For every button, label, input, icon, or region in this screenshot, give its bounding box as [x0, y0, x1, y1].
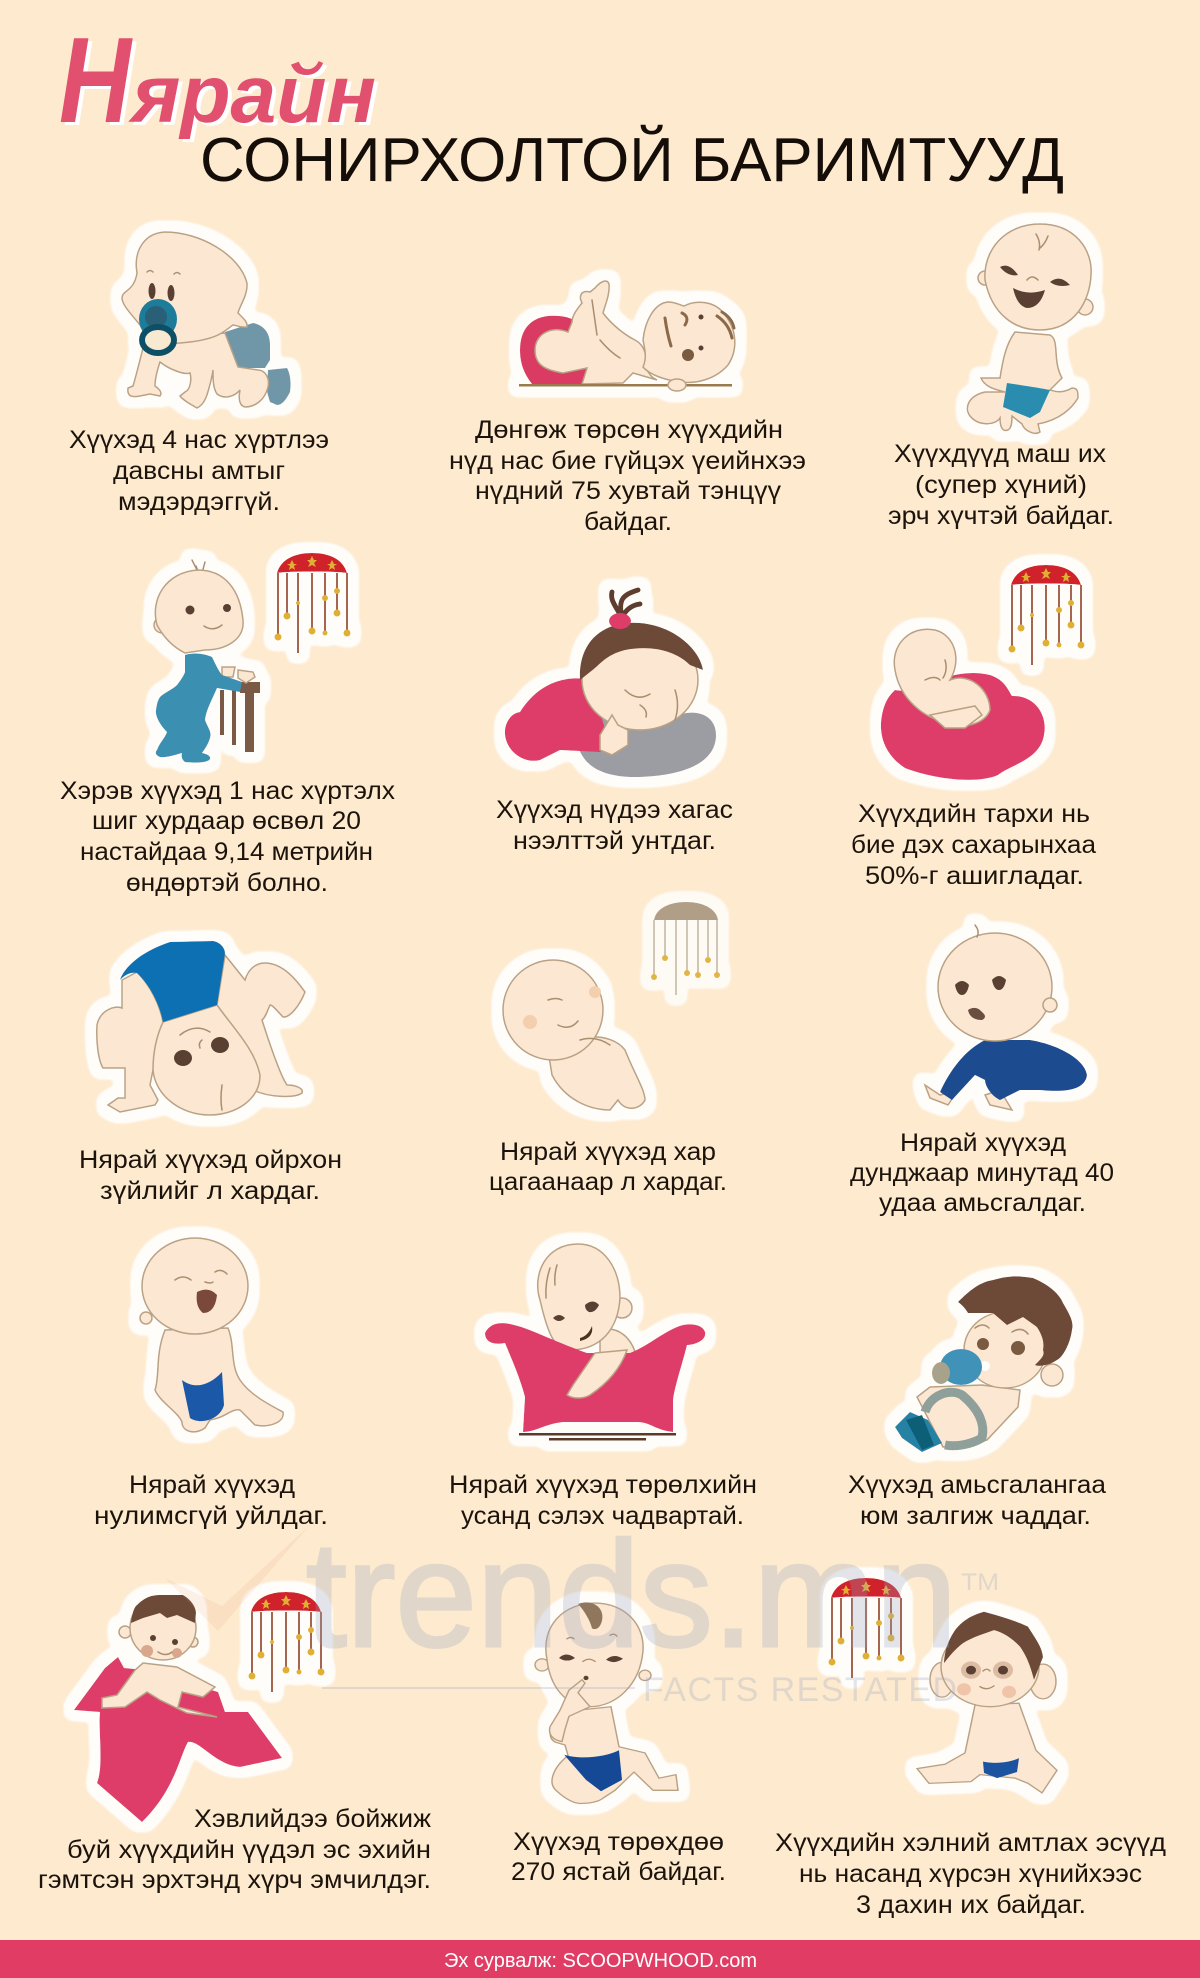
- illustration: red mobile: [1008, 565, 1084, 665]
- caption 8: [489, 1138, 727, 1196]
- caption 7: зүйлийг л хардаг.: [100, 1177, 320, 1205]
- illustration: baby with pacifier: [122, 232, 291, 408]
- caption 4: Хэрэв хүүхэд 1 нас хүртэлх: [60, 777, 396, 805]
- illustration: sleeping girl: [505, 590, 716, 777]
- illustration: baby in tub: [485, 1244, 705, 1440]
- caption 1: давсны амтыг: [113, 457, 285, 485]
- caption 2: [449, 416, 806, 536]
- caption 2: Дөнгөж төрсөн хүүхдийн: [475, 416, 783, 444]
- footer source text: Эх сурвалж: SCOOPWHOOD.com: [444, 1950, 757, 1972]
- caption 7: [79, 1146, 342, 1205]
- illustration: baby on cloud: [881, 629, 1045, 780]
- illustration: red mobile: [248, 1592, 324, 1692]
- caption 5: нээлттэй унтдаг.: [513, 827, 716, 855]
- caption 15: 3 дахин их байдаг.: [856, 1891, 1086, 1919]
- fact 10: crying baby: [94, 1238, 328, 1530]
- title: Нярайн: ярайн: [132, 52, 380, 143]
- fact 13: baby in pink blanket with mobile: [38, 1592, 431, 1894]
- fact 14: thinking baby: [511, 1602, 726, 1886]
- fact 4: standing baby at crib with mobile: [60, 553, 396, 897]
- title: Нярайн: ярайн: [128, 49, 376, 140]
- illustration: standing baby: [154, 560, 260, 763]
- caption 9: [850, 1129, 1114, 1217]
- caption 1: [69, 426, 329, 516]
- caption 3: Хүүхдүүд маш их: [894, 440, 1107, 468]
- illustration: laughing baby: [967, 224, 1093, 433]
- fact 15: sitting baby with rosy cheeks and mobile: [775, 1578, 1166, 1919]
- caption 10: нулимсгүй уйлдаг.: [94, 1502, 328, 1530]
- caption 5: Хүүхэд нүдээ хагас: [496, 796, 733, 824]
- caption 4: өндөртэй болно.: [126, 869, 328, 897]
- caption 4: шиг хурдаар өсвөл 20: [92, 807, 361, 835]
- caption 14: Хүүхэд төрөхдөө: [513, 1828, 724, 1856]
- illustration: thinking baby: [535, 1602, 678, 1803]
- illustration: red mobile: [274, 553, 350, 653]
- illustration: baby with bottle: [895, 1276, 1073, 1452]
- caption 9: удаа амьсгалдаг.: [879, 1189, 1086, 1217]
- caption 12: юм залгиж чаддаг.: [860, 1502, 1091, 1530]
- illustration: sitting baby: [917, 1612, 1057, 1793]
- footer band: [0, 1940, 1200, 1978]
- caption 5: [496, 796, 733, 855]
- title: Нярайн: Н: [59, 12, 133, 148]
- caption 2: нүд нас бие гүйцэх үеийнхээ: [449, 447, 806, 475]
- caption 6: 50%-г ашигладаг.: [865, 862, 1084, 890]
- caption 6: [851, 800, 1096, 890]
- caption 13: гэмтсэн эрхтэнд хүрч эмчилдэг.: [38, 1866, 431, 1894]
- fact 7: upside-down baby: [79, 941, 342, 1205]
- watermark: trends.mn logo overlay: TM: [961, 1569, 999, 1596]
- fact 11: baby in pink bathtub: [449, 1244, 757, 1530]
- illustration: red mobile: [828, 1578, 904, 1678]
- caption 2: нүдний 75 хувтай тэнцүү: [475, 477, 782, 505]
- caption 15: нь насанд хүрсэн хүнийхээс: [799, 1860, 1142, 1888]
- caption 1: мэдэрдэггүй.: [118, 488, 280, 516]
- fact 6: baby asleep on pink cloud with mobile: [851, 565, 1096, 890]
- caption 6: Хүүхдийн тархи нь: [858, 800, 1090, 828]
- caption 11: Нярай хүүхэд төрөлхийн: [449, 1471, 757, 1499]
- caption 6: бие дэх сахарынхаа: [851, 831, 1096, 859]
- fact 8: curled newborn with mobile: [489, 902, 727, 1196]
- illustration: upside-down baby: [97, 941, 305, 1115]
- caption 13: Хэвлийдээ бойжиж: [194, 1805, 431, 1833]
- caption 13: [38, 1805, 431, 1894]
- fact 12: baby drinking from bottle: [848, 1276, 1106, 1530]
- caption 1: Хүүхэд 4 нас хүртлээ: [69, 426, 329, 454]
- caption 15: [775, 1829, 1166, 1919]
- caption 3: эрч хүчтэй байдаг.: [888, 502, 1114, 530]
- caption 8: Нярай хүүхэд хар: [500, 1138, 716, 1166]
- illustration: tan mobile: [651, 902, 720, 995]
- caption 9: дунджаар минутад 40: [850, 1159, 1114, 1187]
- caption 7: Нярай хүүхэд ойрхон: [79, 1146, 342, 1174]
- caption 3: (супер хүний): [915, 471, 1087, 499]
- illustration: lying baby: [519, 281, 735, 391]
- caption 14: [511, 1828, 726, 1886]
- illustration: crawling baby in navy: [925, 925, 1087, 1110]
- title: Нярайн: [59, 12, 380, 151]
- caption 11: усанд сэлэх чадвартай.: [461, 1502, 744, 1530]
- fact 1: crawling baby with pacifier: [69, 232, 329, 516]
- caption 13: буй хүүхдийн үүдэл эс эхийн: [67, 1836, 431, 1864]
- caption 4: настайдаа 9,14 метрийн: [80, 838, 373, 866]
- caption 10: Нярай хүүхэд: [129, 1471, 295, 1499]
- fact 3: laughing sitting baby: [888, 224, 1114, 530]
- caption 12: [848, 1471, 1106, 1530]
- fact 9: crawling baby in navy: [850, 925, 1114, 1217]
- caption 2: байдаг.: [584, 508, 672, 536]
- illustration: crying baby: [140, 1238, 283, 1432]
- caption 10: [94, 1471, 328, 1530]
- fact 2: baby lying on back: [449, 281, 806, 536]
- caption 8: цагаанаар л хардаг.: [489, 1168, 727, 1196]
- watermark: trends.mn logo overlay: trends.mn: [306, 1510, 957, 1678]
- caption 3: [888, 440, 1114, 530]
- watermark: trends.mn logo overlay: [165, 1510, 999, 1709]
- caption 4: [60, 777, 396, 897]
- caption 15: Хүүхдийн хэлний амтлах эсүүд: [775, 1829, 1166, 1857]
- caption 11: [449, 1471, 757, 1530]
- caption 9: Нярай хүүхэд: [900, 1129, 1066, 1157]
- illustration: curled newborn: [503, 960, 645, 1110]
- caption 12: Хүүхэд амьсгалангаа: [848, 1471, 1106, 1499]
- watermark: trends.mn logo overlay: FACTS RESTATED: [643, 1671, 957, 1709]
- title: СОНИРХОЛТОЙ БАРИМТУУД: СОНИРХОЛТОЙ БАРИМТУУД: [200, 125, 1064, 195]
- title: Нярайн: Н: [63, 15, 137, 151]
- illustration: baby on blanket: [74, 1595, 282, 1822]
- fact 5: sleeping girl on pillow: [496, 590, 733, 855]
- caption 14: 270 ястай байдаг.: [511, 1858, 726, 1886]
